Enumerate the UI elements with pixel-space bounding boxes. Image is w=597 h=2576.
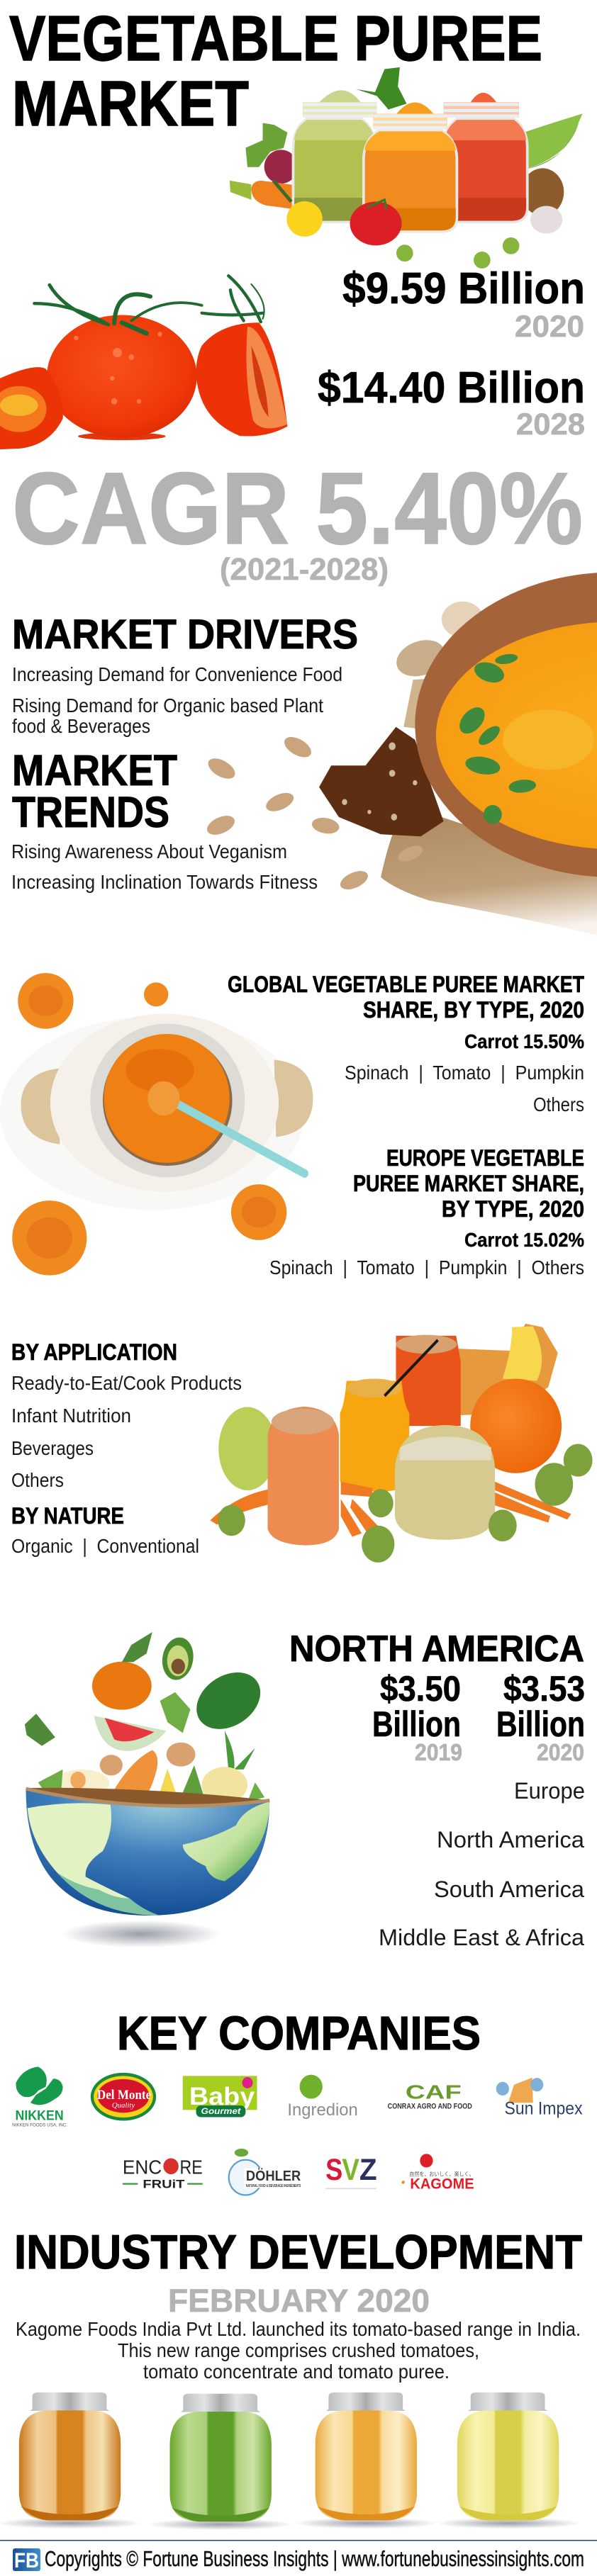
logo: Sun Impex: Sun Impex (505, 2099, 583, 2119)
half tomato right (196, 276, 287, 437)
photo: jars, apple, orange and carrots (210, 1324, 593, 1563)
jar: pale yellow (457, 2392, 559, 2521)
logo: Dohler (229, 2149, 303, 2195)
logo: Encore Fruit: ENC (123, 2156, 162, 2178)
development description (16, 2318, 581, 2383)
logo: Del Monte: Quality (112, 2102, 135, 2110)
stat: CAGR: (2021-2028) (220, 552, 389, 587)
illustration: world salad bowl (25, 1632, 269, 1947)
market drivers: Increasing Demand for Convenience Food (12, 663, 342, 685)
logo: Sun Impex (496, 2078, 583, 2119)
market drivers (12, 612, 358, 737)
logo: SVZ: S (325, 2152, 342, 2186)
logo: Del Monte (91, 2073, 156, 2121)
north america values: Billion (372, 1704, 461, 1744)
by nature (11, 1503, 199, 1557)
footer (0, 2540, 597, 2572)
europe share by type: BY TYPE, 2020 (442, 1196, 584, 1222)
north america heading: NORTH AMERICA (289, 1629, 584, 1670)
market trends: Rising Awareness About Veganism (11, 840, 287, 862)
logo: CAF: CONRAX AGRO AND FOOD (388, 2102, 472, 2111)
by application (11, 1339, 242, 1491)
logo: Dohler: DÖHLER (246, 2168, 301, 2184)
market drivers: MARKET DRIVERS (12, 612, 358, 658)
stat: 2028 value: 2028 (516, 407, 585, 441)
regions list: Europe (514, 1778, 585, 1804)
logo: Kagome: 自然を、おいしく、楽しく。 (409, 2170, 474, 2177)
photo: pumpkin soup bowl (319, 573, 597, 935)
by application: Others (11, 1469, 64, 1491)
logo: SVZ: Z (359, 2152, 377, 2186)
logo: Baby Gourmet: Gourmet (201, 2106, 241, 2116)
globe bowl (26, 1788, 269, 1916)
logo: Nikken (12, 2066, 67, 2127)
jar: orange (364, 102, 457, 232)
stat: 2020 value: 2020 (515, 310, 584, 344)
global share by type (228, 972, 584, 1115)
logo: Del Monte: Del Monte (97, 2088, 151, 2103)
stat: 2028 value: $14.40 Billion (318, 364, 585, 412)
europe share by type (269, 1145, 584, 1278)
market trends: MARKET (12, 746, 177, 794)
stat: 2020 value (342, 264, 585, 344)
regions list: North America (437, 1827, 584, 1852)
logo: SVZ (325, 2152, 377, 2188)
north america values (372, 1669, 585, 1765)
logo: Dohler: NATURAL FOOD & BEVERAGE INGREDIENTS (246, 2184, 301, 2188)
regions list: Middle East & Africa (379, 1925, 584, 1950)
development description: This new range comprises crushed tomatoes, (118, 2339, 479, 2361)
by application: Beverages (11, 1437, 94, 1459)
by application: BY APPLICATION (11, 1339, 177, 1365)
north america values: $3.53 (503, 1669, 585, 1709)
market drivers: Rising Demand for Organic based Plant (12, 694, 323, 716)
jar: green (170, 2394, 272, 2521)
jar: red (444, 93, 528, 222)
development date: FEBRUARY 2020 (168, 2283, 430, 2319)
logo: Encore Fruit: FRUiT (143, 2178, 184, 2190)
logo: Kagome: KAGOME (410, 2176, 474, 2193)
logo: CAF (388, 2081, 472, 2111)
market trends: Increasing Inclination Towards Fitness (11, 871, 318, 893)
development description: tomato concentrate and tomato puree. (143, 2361, 450, 2383)
logo: Baby Gourmet (183, 2076, 257, 2117)
logo: Encore Fruit (123, 2156, 203, 2190)
stat: 2020 value: $9.59 Billion (342, 264, 585, 313)
key companies heading: KEY COMPANIES (117, 2007, 481, 2060)
global share by type: Carrot 15.50% (464, 1030, 584, 1052)
company logos (12, 2066, 583, 2195)
by nature: BY NATURE (11, 1503, 124, 1529)
market trends: TRENDS (12, 788, 169, 836)
logo: Nikken: NIKKEN FOODS USA, INC. (12, 2123, 67, 2127)
market drivers: food & Beverages (12, 715, 150, 737)
north america values: 2019 (415, 1739, 462, 1765)
logo: SVZ: V (342, 2152, 359, 2186)
jar: yellow-orange (316, 2392, 417, 2521)
stat: 2028 value (318, 364, 585, 441)
jar: green (293, 90, 377, 222)
title (9, 4, 542, 140)
market trends (11, 746, 318, 893)
photo: tomatoes (0, 276, 287, 449)
logo: Ingredion: Ingredion (287, 2101, 358, 2120)
logo: CAF: CAF (406, 2081, 462, 2103)
logo: Ingredion (287, 2075, 358, 2120)
by application: Infant Nutrition (11, 1405, 131, 1427)
half tomato left (0, 367, 63, 449)
pumpkin seeds (205, 733, 425, 893)
icon: Fortune Business Insights logo: FB (14, 2549, 39, 2572)
logo: Nikken: NIKKEN (15, 2108, 64, 2122)
photo: baby bowl with carrot puree (0, 973, 313, 1276)
by nature: Organic | Conventional (11, 1535, 199, 1557)
by application: Ready-to-Eat/Cook Products (11, 1372, 242, 1394)
whole tomato (34, 285, 202, 440)
title: MARKET (12, 69, 249, 140)
falling vegetables (25, 1632, 269, 1803)
europe share by type: Carrot 15.02% (464, 1229, 584, 1251)
logo: Baby Gourmet: Baby (189, 2083, 255, 2110)
logo: Encore Fruit: RE (179, 2156, 203, 2178)
north america values: 2020 (537, 1739, 584, 1765)
global share by type: Others (533, 1093, 584, 1115)
regions list: South America (434, 1877, 584, 1902)
north america values: $3.50 (380, 1669, 461, 1709)
jar: amber (19, 2392, 121, 2521)
illustration: puree jars with vegetables (230, 67, 583, 269)
row of puree jars (0, 2392, 581, 2530)
logo: Kagome (402, 2154, 474, 2193)
regions list (379, 1778, 585, 1950)
